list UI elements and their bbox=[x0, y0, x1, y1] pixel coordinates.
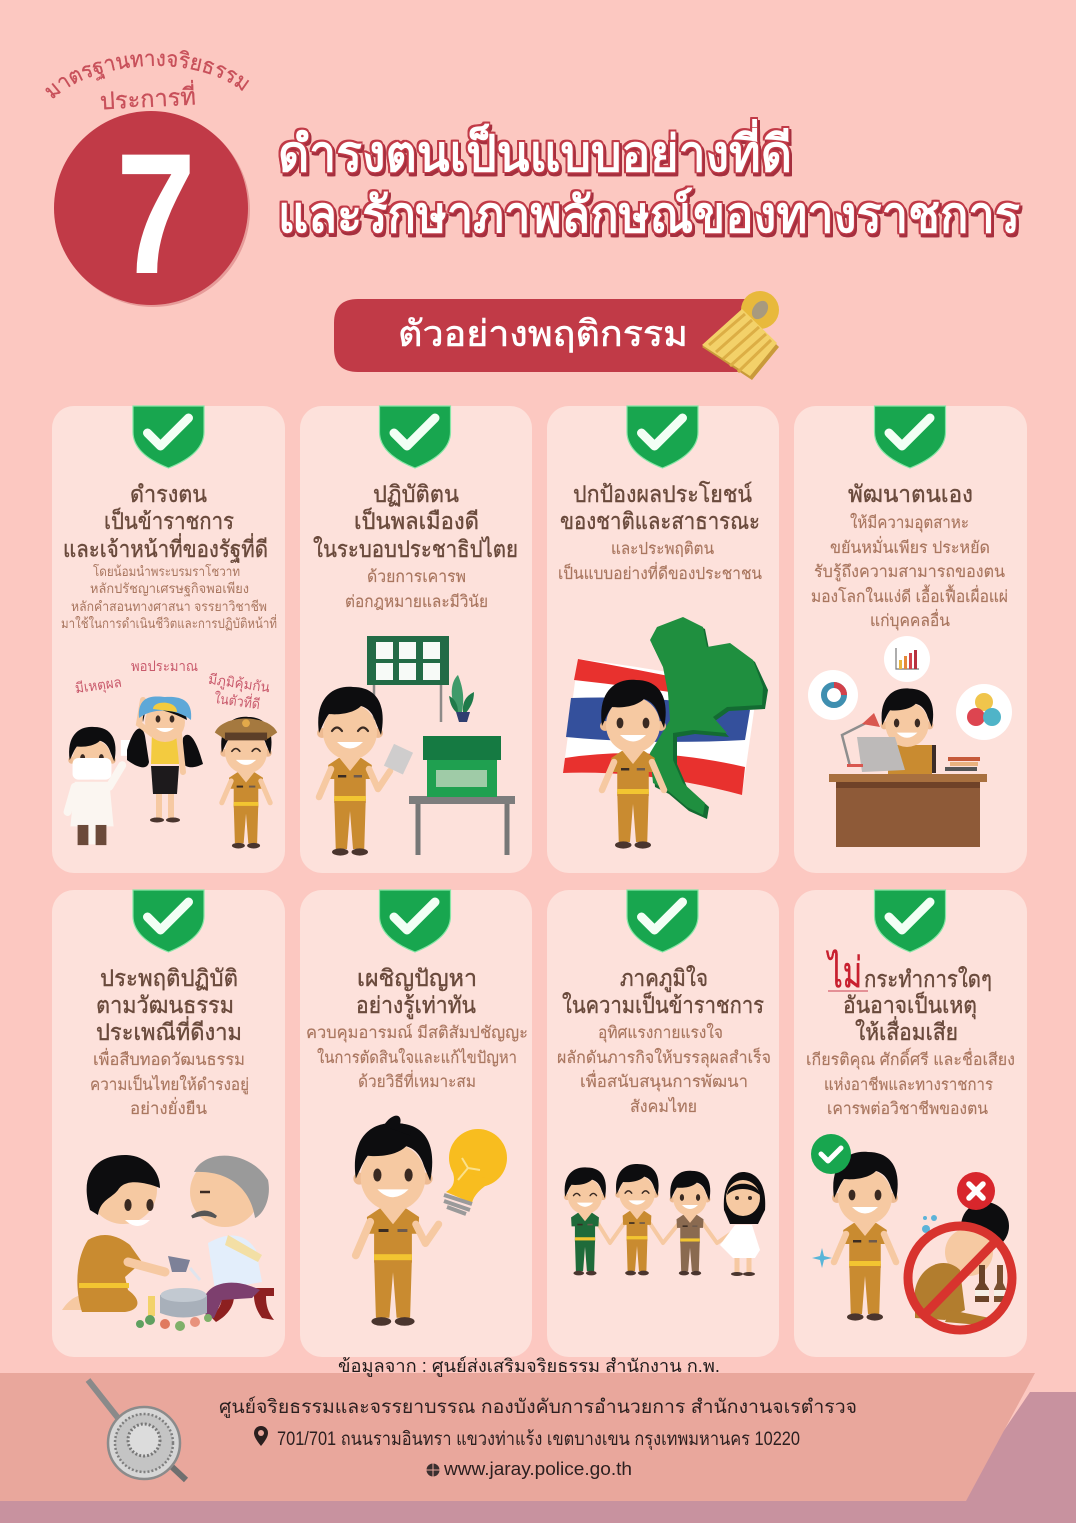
elder bbox=[190, 1156, 274, 1322]
sparkles bbox=[812, 1248, 832, 1268]
card 6 heading bbox=[356, 965, 477, 1019]
icon: location pin bbox=[254, 1426, 268, 1446]
illustration: Thailand map bbox=[650, 617, 768, 819]
card 3 description: เป็นแบบอย่างที่ดีของประชาชน bbox=[558, 562, 762, 583]
card 6 description: ในการตัดสินใจและแก้ไขปัญหา bbox=[317, 1048, 517, 1067]
labels: three sufficiency principles: พอประมาณ bbox=[131, 658, 198, 674]
title bbox=[278, 120, 1020, 243]
card 8 heading: อันอาจเป็นเหตุ bbox=[843, 990, 977, 1019]
illustration: four public servants holding hands bbox=[564, 1164, 765, 1276]
silver bowl with flowers bbox=[136, 1288, 212, 1331]
card 8 heading: กระทำการใดๆ bbox=[864, 966, 992, 992]
illustration: Thai flag bbox=[563, 659, 757, 795]
icon: check shield bbox=[133, 406, 204, 468]
icon: red cross bbox=[957, 1172, 995, 1210]
card 2 heading: ในระบอบประชาธิปไตย bbox=[313, 536, 518, 562]
illustration: doctor bbox=[68, 727, 132, 845]
icon: check shield bbox=[874, 406, 946, 468]
books bbox=[945, 757, 980, 771]
illustration: officer bbox=[600, 680, 666, 849]
card 8 description: เกียรติคุณ ศักดิ์ศรี และชื่อเสียง bbox=[806, 1047, 1015, 1070]
labels: three sufficiency principles: มีภูมิคุ้มกัน bbox=[207, 671, 271, 696]
card 3 heading bbox=[560, 481, 760, 534]
illustration: officer voting bbox=[317, 687, 413, 856]
footer organisation name: ศูนย์จริยธรรมและจรรยาบรรณ กองบังคับการอำนวยการ สำนักงานจเรตำรวจ bbox=[219, 1396, 857, 1418]
illustration: officer with idea bbox=[353, 1116, 439, 1326]
card 3 description bbox=[558, 540, 762, 583]
card 8 heading: ไม่ bbox=[826, 949, 862, 996]
card 5 description bbox=[90, 1048, 249, 1118]
card 2 heading bbox=[313, 481, 518, 562]
card 8 description: แห่งอาชีพและทางราชการ bbox=[824, 1076, 993, 1094]
illustration: ballot box on table bbox=[409, 736, 515, 855]
card 8 heading: ให้เสื่อมเสีย bbox=[855, 1016, 958, 1045]
card 4 description: แก่บุคคลอื่น bbox=[870, 609, 950, 631]
icon: light bulb bbox=[444, 1129, 507, 1214]
card 8 description: เคารพต่อวิชาชีพของตน bbox=[827, 1100, 988, 1118]
illustration: upright officer bbox=[832, 1152, 898, 1321]
card 4 heading: พัฒนาตนเอง bbox=[848, 481, 973, 507]
icon: epaulette bbox=[702, 291, 779, 380]
panel: card 8 bbox=[794, 890, 1027, 1357]
card 5 description: ความเป็นไทยให้ดำรงอยู่ bbox=[90, 1074, 249, 1095]
card 7 heading: ในความเป็นข้าราชการ bbox=[562, 990, 764, 1018]
card 6 description: ควบคุมอารมณ์ มีสติสัมปชัญญะ bbox=[306, 1023, 528, 1043]
card 4 description: รับรู้ถึงความสามารถของตน bbox=[814, 563, 1005, 582]
illustration: officer with cap bbox=[215, 717, 277, 848]
icon: bar chart bubble bbox=[884, 636, 930, 682]
labels: three sufficiency principles: ในตัวที่ดี bbox=[213, 689, 261, 712]
banner text: ตัวอย่างพฤติกรรม bbox=[398, 313, 688, 354]
card 5 description: เพื่อสืบทอดวัฒนธรรม bbox=[93, 1048, 245, 1069]
illustration: officer pouring water for elder bbox=[62, 1155, 274, 1331]
panel: card 1 bbox=[52, 406, 285, 873]
panel: card 7 bbox=[547, 890, 779, 1357]
kneeling officer bbox=[62, 1155, 200, 1312]
card 1 heading: และเจ้าหน้าที่ของรัฐที่ดี bbox=[63, 533, 268, 563]
badge: standard number 7 bbox=[45, 50, 250, 310]
card 2 heading: ปฏิบัติตน bbox=[373, 481, 459, 507]
card 7 heading: ภาคภูมิใจ bbox=[620, 965, 708, 992]
card 3 description: และประพฤติตน bbox=[611, 540, 714, 558]
icon: globe bbox=[426, 1464, 440, 1476]
panel: card 4 bbox=[794, 406, 1027, 873]
illustration: woman with cap bbox=[127, 696, 203, 822]
card 2 description: ต่อกฎหมายและมีวินัย bbox=[345, 593, 488, 611]
icon: green check bbox=[811, 1134, 851, 1174]
icon: check shield bbox=[627, 406, 698, 468]
icon: check shield bbox=[133, 890, 204, 952]
label: ประการที่: ประการที่ bbox=[99, 80, 197, 115]
card 5 heading: ประเพณีที่ดีงาม bbox=[96, 1016, 242, 1045]
illustration: plant bbox=[449, 675, 474, 722]
source credit: ข้อมูลจาก : ศูนย์ส่งเสริมจริยธรรม สำนักงาน ก.พ. bbox=[338, 1356, 720, 1377]
card 7 description: ผลักดันภารกิจให้บรรลุผลสำเร็จ bbox=[557, 1047, 771, 1068]
card 1 heading bbox=[63, 481, 268, 563]
footer address: 701/701 ถนนรามอินทรา แขวงท่าแร้ง เขตบางเขน กรุงเทพมหานคร 10220 bbox=[277, 1429, 800, 1451]
card 6 heading: เผชิญปัญหา bbox=[357, 965, 477, 991]
labels: three sufficiency principles bbox=[74, 658, 271, 712]
desk bbox=[829, 774, 987, 847]
card 1 description: โดยน้อมนำพระบรมราโชวาท bbox=[93, 563, 240, 579]
card 6 heading: อย่างรู้เท่าทัน bbox=[356, 992, 476, 1019]
icon: check shield bbox=[380, 406, 450, 468]
illustration: officer at desk bbox=[829, 688, 987, 847]
card 7 heading bbox=[562, 965, 764, 1018]
panel: card 3 bbox=[547, 406, 779, 873]
illustration: prohibited drinking bbox=[908, 1202, 1012, 1330]
card 2 description bbox=[345, 568, 488, 611]
card 2 heading: เป็นพลเมืองดี bbox=[354, 506, 479, 534]
card 1 description: หลักปรัชญาเศรษฐกิจพอเพียง bbox=[90, 581, 249, 597]
icon: donut chart bubble bbox=[808, 670, 858, 720]
card 4 description: ให้มีความอุตสาหะ bbox=[850, 513, 969, 533]
number circle: 7 bbox=[116, 118, 196, 310]
footer website: www.jaray.police.go.th bbox=[443, 1459, 632, 1479]
card 6 description: ด้วยวิธีที่เหมาะสม bbox=[358, 1070, 476, 1091]
card 1 heading: ดำรงตน bbox=[130, 481, 207, 507]
card 5 description: อย่างยั่งยืน bbox=[130, 1097, 207, 1118]
card 7 description: สังคมไทย bbox=[630, 1097, 697, 1116]
icon: police seal and sword bbox=[88, 1380, 186, 1480]
icon: check shield bbox=[380, 890, 450, 952]
panel: card 5 bbox=[52, 890, 285, 1357]
card 2 description: ด้วยการเคารพ bbox=[367, 568, 466, 586]
card 5 heading bbox=[96, 965, 242, 1045]
card 7 description bbox=[557, 1023, 771, 1116]
card 5 heading: ประพฤติปฏิบัติ bbox=[100, 965, 238, 991]
card 4 description: มองโลกในแง่ดี เอื้อเฟื้อเผื่อแผ่ bbox=[811, 584, 1008, 606]
card 1 description: หลักคำสอนทางศาสนา จรรยาวิชาชีพ bbox=[71, 599, 267, 614]
curved label: มาตรฐานทางจริยธรรม bbox=[45, 50, 250, 98]
card 6 description bbox=[306, 1023, 528, 1091]
title: ดำรงตนเป็นแบบอย่างที่ดี bbox=[278, 120, 792, 182]
panel: card 6 bbox=[300, 890, 532, 1357]
card 5 heading: ตามวัฒนธรรม bbox=[96, 992, 234, 1018]
footer accent bbox=[0, 1392, 1076, 1523]
number circle bbox=[54, 111, 250, 310]
panel: card 2 bbox=[300, 406, 532, 873]
icon: check shield bbox=[627, 890, 698, 952]
card 1 description bbox=[61, 563, 277, 631]
card 3 heading: ปกป้องผลประโยชน์ bbox=[573, 481, 752, 507]
lamp bbox=[842, 713, 880, 767]
icon: check shield bbox=[874, 890, 946, 952]
icon: venn bubble bbox=[956, 684, 1012, 740]
card 4 description: ขยันหมั่นเพียร ประหยัด bbox=[830, 536, 990, 557]
card 1 heading: เป็นข้าราชการ bbox=[104, 506, 234, 534]
illustration: notice board bbox=[367, 636, 449, 722]
card 1 description: มาใช้ในการดำเนินชีวิตและการปฏิบัติหน้าที่ bbox=[61, 614, 277, 631]
card 8 heading bbox=[826, 949, 992, 1045]
card 3 heading: ของชาติและสาธารณะ bbox=[560, 508, 760, 534]
card 8 description bbox=[806, 1047, 1015, 1118]
card 4 description bbox=[811, 513, 1008, 631]
footer band bbox=[0, 1373, 1035, 1501]
card 7 description: เพื่อสนับสนุนการพัฒนา bbox=[580, 1070, 748, 1092]
labels: three sufficiency principles: มีเหตุผล bbox=[74, 674, 123, 697]
card 7 description: อุทิศแรงกายแรงใจ bbox=[598, 1023, 723, 1043]
title: และรักษาภาพลักษณ์ของทางราชการ bbox=[278, 187, 1020, 243]
section banner: behaviour examples bbox=[334, 291, 779, 380]
